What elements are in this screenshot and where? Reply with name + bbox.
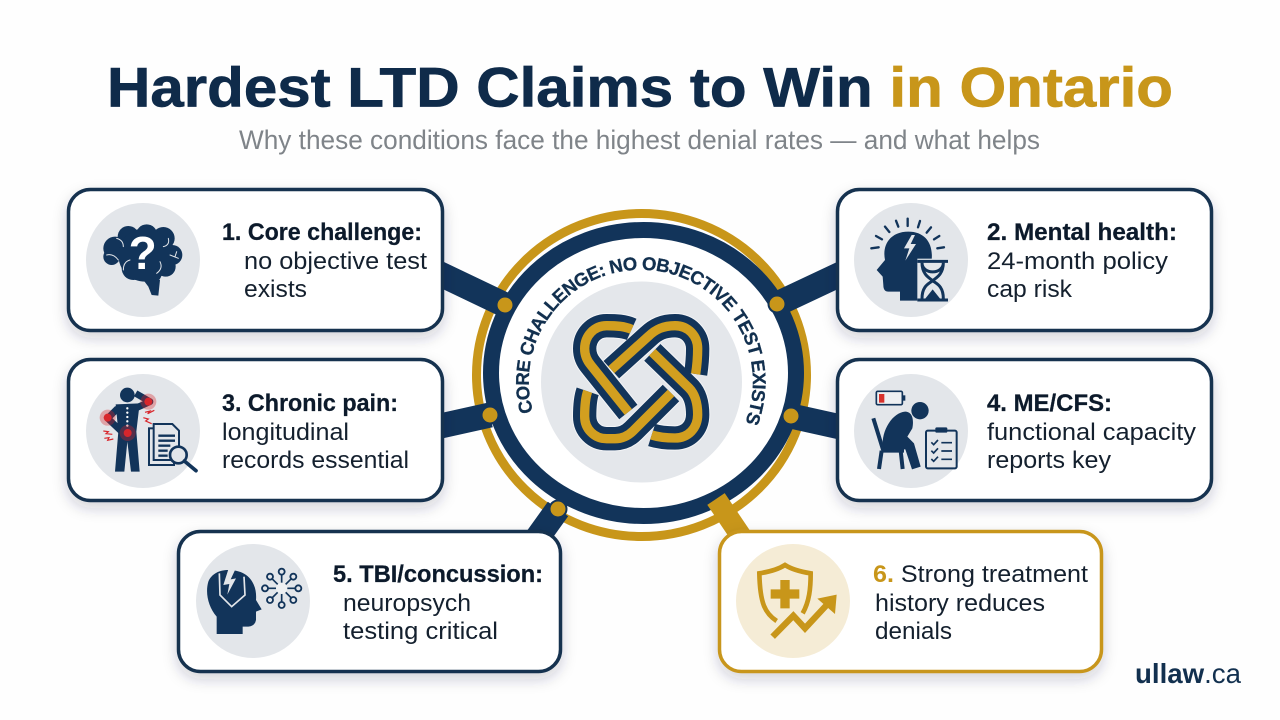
panel: card 4 ME/CFS [838, 360, 1212, 500]
text: card 5: neuropsych [343, 590, 471, 617]
text: card 1 [222, 219, 427, 303]
text: card 5: testing critical [343, 618, 498, 645]
icon: interlocking knot [585, 326, 698, 439]
text: card 6: history reduces [875, 590, 1045, 617]
text: card 3 [222, 390, 409, 474]
text: card 6: denials [875, 618, 952, 645]
panel: card 2 mental health [838, 190, 1212, 330]
text: card 4: functional capacity [987, 419, 1196, 446]
panel: card 3 chronic pain [68, 360, 442, 500]
connectors [436, 272, 845, 548]
text: card 5: 5. TBI/concussion: [333, 561, 543, 588]
circular label: CORE CHALLENGE: NO OBJECTIVE TEST EXISTS [516, 257, 766, 425]
text: card 5 [333, 561, 543, 645]
text: card 2: cap risk [987, 276, 1073, 303]
title: Hardest LTD Claims to Win in Ontario [107, 56, 1173, 118]
logo: ullaw.ca: ullaw.ca [1135, 658, 1241, 689]
text: card 6: 6. Strong treatment [873, 561, 1088, 588]
text: card 1: no objective test [244, 248, 427, 275]
text: card 1: exists [244, 276, 307, 303]
navy ring [491, 230, 796, 516]
text: card 2: 2. Mental health: [987, 219, 1177, 246]
text: card 3: records essential [222, 447, 409, 474]
icon: exhausted person with clipboard [854, 374, 968, 488]
icon: head with shield and neural network [196, 544, 310, 658]
text: card 4: 4. ME/CFS: [987, 390, 1112, 417]
icon: shield with cross and rising arrow [736, 544, 850, 658]
text: card 3: longitudinal [222, 419, 349, 446]
text: card 1: 1. Core challenge: [222, 219, 422, 246]
text: card 2 [987, 219, 1177, 303]
icon: head with bolt and hourglass [854, 203, 968, 317]
panel: card 6 treatment history [720, 532, 1102, 672]
outer gold ring [476, 214, 806, 536]
text: card 3: 3. Chronic pain: [222, 390, 398, 417]
gold connector to card 6 [716, 499, 745, 542]
subtitle: Why these conditions face the highest denial rates — and what helps [239, 125, 1040, 155]
panel: card 5 TBI/concussion [178, 532, 560, 672]
icon: person in pain with records [86, 374, 200, 488]
icon: brain with question mark [86, 203, 200, 317]
icon: brain with question mark: ? [129, 227, 157, 279]
text: card 6 [873, 561, 1088, 645]
panel: card 1 core challenge [68, 190, 442, 330]
grey centre disc [541, 282, 742, 482]
central hub [444, 209, 836, 541]
connector dots [482, 296, 800, 518]
text: card 2: 24-month policy [987, 248, 1168, 275]
text: card 4: reports key [987, 447, 1111, 474]
text: card 4 [987, 390, 1196, 474]
